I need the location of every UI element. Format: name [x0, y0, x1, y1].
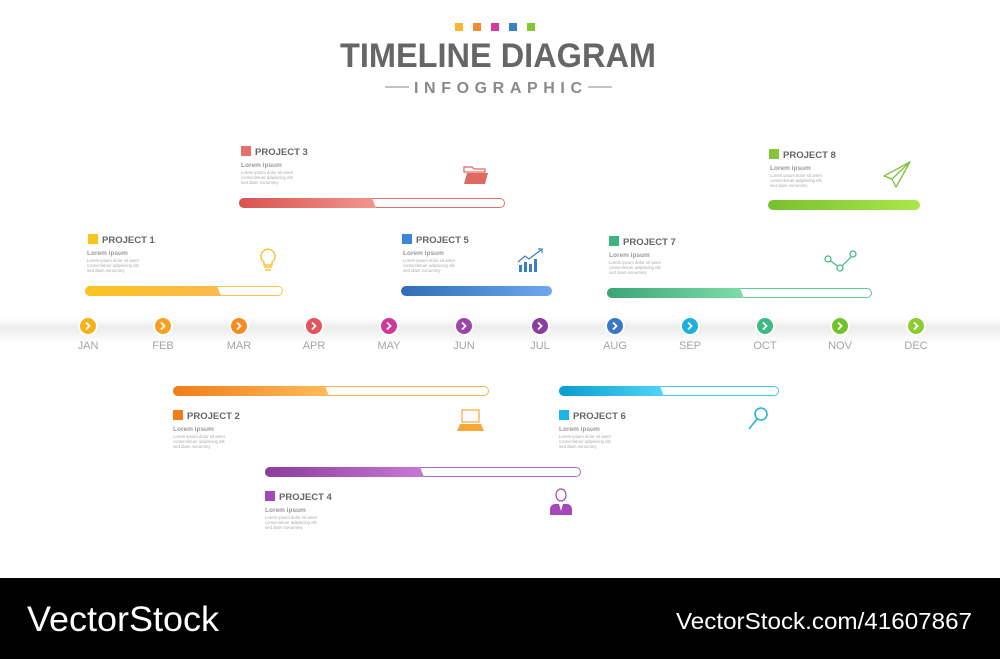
- project 4: sed diam nonummy: [265, 525, 303, 530]
- project 3: consectetuer adipiscing elit: [241, 175, 293, 180]
- project 7: sed diam nonummy: [609, 270, 647, 275]
- project 2: consectetuer adipiscing elit: [173, 439, 225, 444]
- project 3: [241, 146, 308, 185]
- project 8: Lorem ipsum: [770, 165, 811, 172]
- project 7: Lorem ipsum dolor sit amet: [609, 260, 662, 265]
- subtitle: INFOGRAPHIC: [414, 80, 582, 97]
- project 5: [402, 234, 470, 273]
- project 5: sed diam nonummy: [403, 268, 441, 273]
- project 1: sed diam nonummy: [87, 268, 125, 273]
- bar: project 1: [85, 286, 282, 296]
- project 5: PROJECT 5: [416, 235, 470, 246]
- project 3: Lorem ipsum dolor sit amet: [241, 170, 294, 175]
- months: JAN: [78, 340, 98, 352]
- project 2: sed diam nonummy: [173, 444, 211, 449]
- project 1: consectetuer adipiscing elit: [87, 263, 139, 268]
- months: OCT: [753, 340, 777, 352]
- footer: [0, 578, 1000, 659]
- icon: light bulb: [261, 249, 275, 270]
- bar: project 4: [265, 467, 580, 477]
- months: APR: [303, 340, 325, 352]
- icon: growth chart: [518, 249, 542, 272]
- project 6: Lorem ipsum: [559, 426, 600, 433]
- title: TIMELINE DIAGRAM: [340, 37, 656, 75]
- footer: VectorStock.com/41607867: [676, 608, 972, 634]
- project 3: PROJECT 3: [255, 147, 308, 158]
- project 3: Lorem ipsum: [241, 162, 282, 169]
- project 7: Lorem ipsum: [609, 252, 650, 259]
- project 1: Lorem ipsum: [87, 250, 128, 257]
- months: NOV: [828, 340, 853, 352]
- project 6: Lorem ipsum dolor sit amet: [559, 434, 612, 439]
- months: MAR: [227, 340, 251, 352]
- months: JUN: [453, 340, 475, 352]
- months: SEP: [679, 340, 701, 352]
- color squares: [455, 23, 535, 31]
- project 4: [265, 491, 333, 530]
- project 1: [87, 234, 156, 273]
- timeline band: [0, 318, 1000, 344]
- bar: project 2: [173, 386, 488, 396]
- project 5: Lorem ipsum dolor sit amet: [403, 258, 456, 263]
- months: MAY: [377, 340, 401, 352]
- project 8: consectetuer adipiscing elit: [770, 178, 822, 183]
- project 5: consectetuer adipiscing elit: [403, 263, 455, 268]
- project 6: [559, 410, 626, 449]
- project 8: [769, 149, 836, 188]
- months: DEC: [904, 340, 928, 352]
- icon: person: [550, 489, 572, 515]
- project 4: Lorem ipsum dolor sit amet: [265, 515, 318, 520]
- project 5: Lorem ipsum: [403, 250, 444, 257]
- months: FEB: [152, 340, 174, 352]
- project 7: [609, 236, 676, 275]
- project 2: PROJECT 2: [187, 411, 240, 422]
- project 8: Lorem ipsum dolor sit amet: [770, 173, 823, 178]
- project 6: sed diam nonummy: [559, 444, 597, 449]
- project 4: PROJECT 4: [279, 492, 333, 503]
- icon: paper plane: [884, 162, 910, 187]
- bar: project 6: [559, 386, 778, 396]
- icon: folder: [464, 167, 488, 184]
- project 6: PROJECT 6: [573, 411, 626, 422]
- icon: magnifier: [749, 408, 767, 429]
- project 4: Lorem ipsum: [265, 507, 306, 514]
- header: [340, 23, 656, 97]
- project 6: consectetuer adipiscing elit: [559, 439, 611, 444]
- project 7: PROJECT 7: [623, 237, 676, 248]
- project 7: consectetuer adipiscing elit: [609, 265, 661, 270]
- months: JUL: [530, 340, 550, 352]
- bar: project 3: [239, 198, 504, 208]
- project 1: PROJECT 1: [102, 235, 156, 246]
- project 2: Lorem ipsum: [173, 426, 214, 433]
- months: AUG: [603, 340, 627, 352]
- project 1: Lorem ipsum dolor sit amet: [87, 258, 140, 263]
- bar: project 8: [768, 200, 920, 210]
- icon: laptop: [457, 410, 484, 431]
- project 2: [173, 410, 240, 449]
- bar: project 7: [607, 288, 872, 298]
- project 4: consectetuer adipiscing elit: [265, 520, 317, 525]
- footer: VectorStock: [27, 600, 220, 639]
- months: [78, 316, 928, 352]
- project 8: PROJECT 8: [783, 150, 836, 161]
- bar: project 5: [401, 286, 552, 296]
- project 3: sed diam nonummy: [241, 180, 279, 185]
- project 2: Lorem ipsum dolor sit amet: [173, 434, 226, 439]
- project 8: sed diam nonummy: [770, 183, 808, 188]
- icon: network nodes: [825, 251, 856, 271]
